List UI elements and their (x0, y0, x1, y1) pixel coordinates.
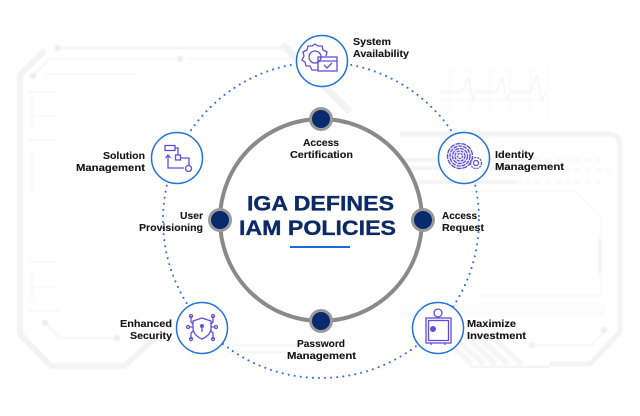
label: access certification: Certification (290, 149, 353, 161)
icon: solution management (152, 132, 202, 184)
label: identity management: Management (495, 161, 565, 173)
label: user provisioning: Provisioning (139, 222, 203, 234)
label: identity management (495, 149, 565, 173)
dotted orbit (163, 62, 479, 378)
label: identity management: Identity (495, 149, 534, 161)
label: maximize investment: Investment (467, 330, 527, 342)
background circuit frame (20, 44, 620, 367)
label: solution management (76, 150, 146, 174)
label: enhanced security: Enhanced (120, 318, 172, 330)
icon: identity management (438, 132, 490, 184)
label: password management: Password (297, 338, 345, 350)
label: system availability (353, 36, 409, 60)
label: password management: Management (287, 350, 357, 362)
label: access certification: Access (303, 137, 339, 149)
label: system availability: Availability (353, 48, 409, 60)
title: IGA DEFINES (247, 192, 394, 216)
label: access request: Request (442, 222, 484, 234)
background ECG chart (440, 66, 548, 118)
title: IAM POLICIES (239, 217, 396, 240)
central gray ring (220, 119, 422, 321)
label: solution management: Solution (103, 150, 145, 162)
title underline (290, 246, 350, 248)
label: user provisioning: User (180, 210, 203, 222)
label: enhanced security: Security (130, 330, 172, 342)
label: access request: Access (442, 210, 477, 222)
label: access request (442, 210, 484, 234)
title (239, 192, 396, 240)
node: password management (309, 309, 333, 333)
label: access certification (290, 137, 353, 161)
label: solution management: Management (76, 162, 146, 174)
label: user provisioning (139, 210, 203, 234)
icon: enhanced security (176, 302, 228, 354)
label: maximize investment: Maximize (467, 318, 516, 330)
node: access request (411, 208, 435, 232)
node: user provisioning (208, 208, 232, 232)
node: access certification (309, 107, 333, 131)
icon: maximize investment (412, 302, 464, 354)
icon: system availability (296, 36, 348, 86)
label: password management (287, 338, 357, 362)
label: enhanced security (120, 318, 172, 342)
label: maximize investment (467, 318, 527, 342)
label: system availability: System (353, 36, 391, 48)
